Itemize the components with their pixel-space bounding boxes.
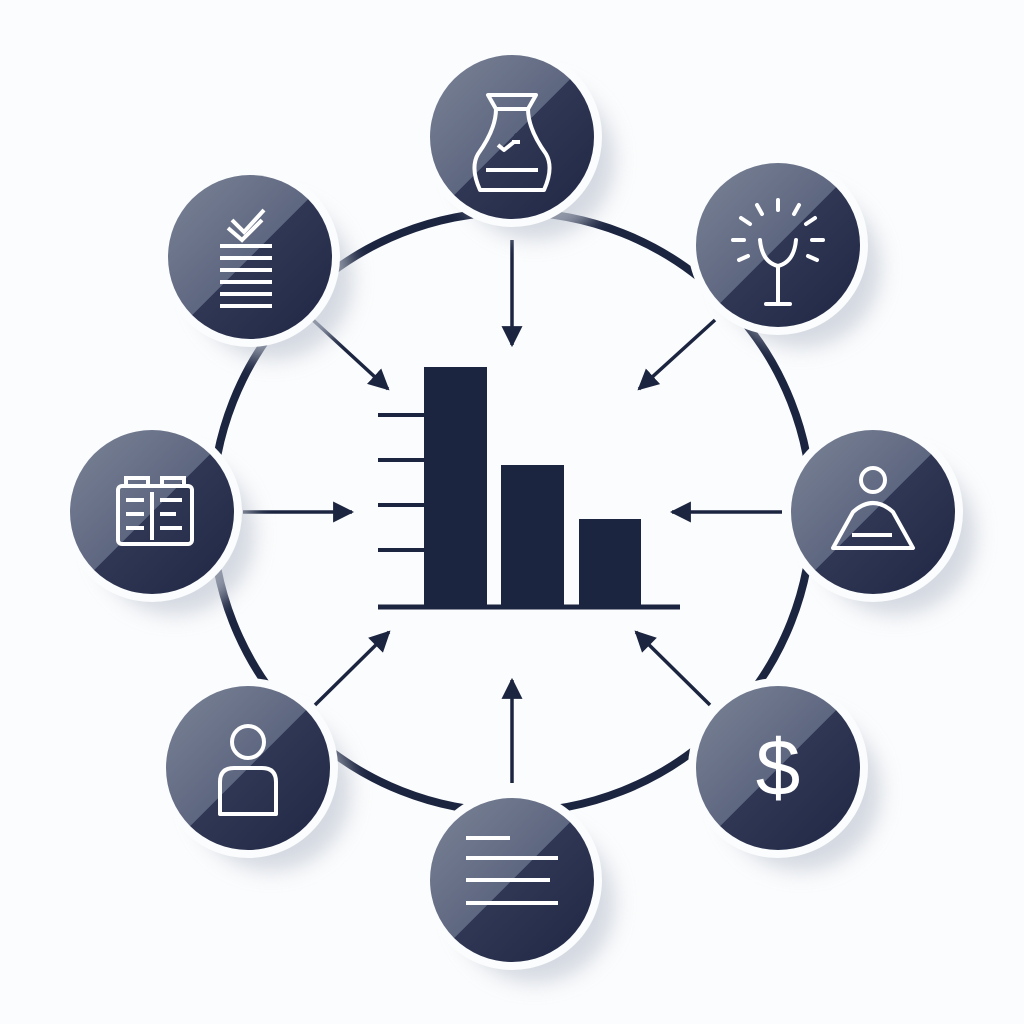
bar chart [378, 367, 680, 607]
ring [212, 212, 812, 812]
node: bottom (text lines) [422, 790, 615, 983]
node: bottom-right (dollar): $ [756, 723, 800, 812]
node: top (bag) [422, 47, 615, 240]
node: bottom-left (person) [158, 678, 351, 871]
arrows [243, 240, 782, 783]
node: right (person at desk) [783, 422, 976, 615]
node: top-right (lamp) [688, 155, 881, 348]
node: left (document) [62, 422, 255, 615]
node: bottom-right (dollar) [688, 678, 881, 871]
node: top-left (checklist) [160, 167, 353, 360]
